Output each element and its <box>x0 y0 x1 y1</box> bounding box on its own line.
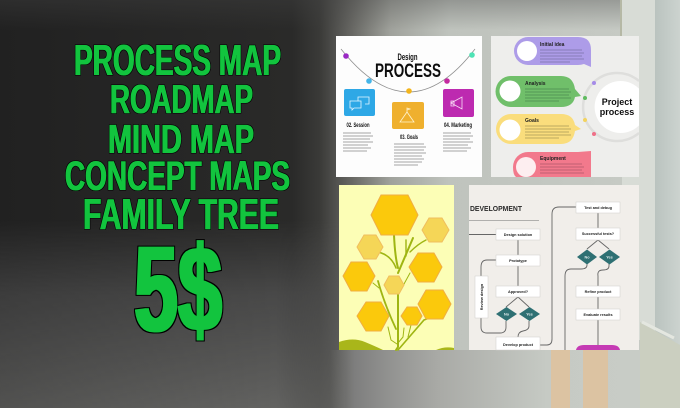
title line: roadmap: ROADMAP <box>110 76 253 122</box>
step: session <box>343 89 375 151</box>
center label: process <box>600 107 634 117</box>
terminal node <box>576 345 620 350</box>
step: session: 02. Session <box>346 123 370 129</box>
ring <box>583 73 639 141</box>
center label <box>600 97 634 117</box>
diamond labels: Yes <box>526 312 533 316</box>
panel: project process <box>491 36 639 177</box>
bubble: equipment: Equipment <box>540 156 566 162</box>
bubble: equipment <box>513 151 591 177</box>
hexagons <box>343 195 451 331</box>
diamond labels: No <box>504 312 510 316</box>
heading: Design <box>398 52 418 62</box>
connectors <box>469 207 609 350</box>
labels: Prototype <box>509 259 527 263</box>
title line: process map: PROCESS MAP <box>74 36 281 85</box>
labels: Develop product <box>503 343 534 347</box>
labels: Successful tests? <box>582 232 615 236</box>
heading <box>375 52 441 82</box>
ground hills <box>339 340 454 350</box>
bubble: initial idea: Initial idea <box>540 42 565 48</box>
panel: design process <box>336 36 482 177</box>
labels <box>480 206 615 347</box>
tree branches <box>373 235 434 350</box>
pale hexagons <box>357 218 449 294</box>
heading: DEVELOPMENT <box>470 206 523 213</box>
price: 5$ <box>134 221 222 357</box>
garland <box>341 49 475 94</box>
bubble: goals <box>496 114 581 144</box>
labels: Design solution <box>504 233 533 237</box>
diamond labels: Yes <box>606 256 613 260</box>
step: marketing: 04. Marketing <box>444 123 472 129</box>
diamond labels <box>504 256 613 316</box>
panel: hexagon tree <box>339 185 454 350</box>
title line: concept maps: CONCEPT MAPS <box>65 152 290 199</box>
title line: mind map: MIND MAP <box>108 116 254 162</box>
bubble: initial idea <box>514 37 591 67</box>
step: goals <box>392 102 426 165</box>
bubble: goals: Goals <box>525 118 539 124</box>
heading: PROCESS <box>375 61 441 82</box>
labels: Evaluate results <box>583 313 613 317</box>
diamond labels: No <box>584 256 590 260</box>
bubble: analysis: Analysis <box>525 81 546 87</box>
labels: Review design <box>480 283 484 310</box>
labels: Approved? <box>508 290 529 294</box>
labels: Test and debug <box>584 206 613 210</box>
step: marketing <box>443 89 474 151</box>
bubble: analysis <box>496 76 581 107</box>
title list <box>65 36 290 239</box>
title line: family tree: FAMILY TREE <box>83 190 279 239</box>
center label: Project <box>602 97 632 107</box>
boxes <box>475 202 620 350</box>
decision diamonds <box>496 250 620 321</box>
labels: Refine product <box>585 290 612 294</box>
step: goals: 03. Goals <box>400 135 418 141</box>
panel: development flowchart <box>469 185 639 350</box>
